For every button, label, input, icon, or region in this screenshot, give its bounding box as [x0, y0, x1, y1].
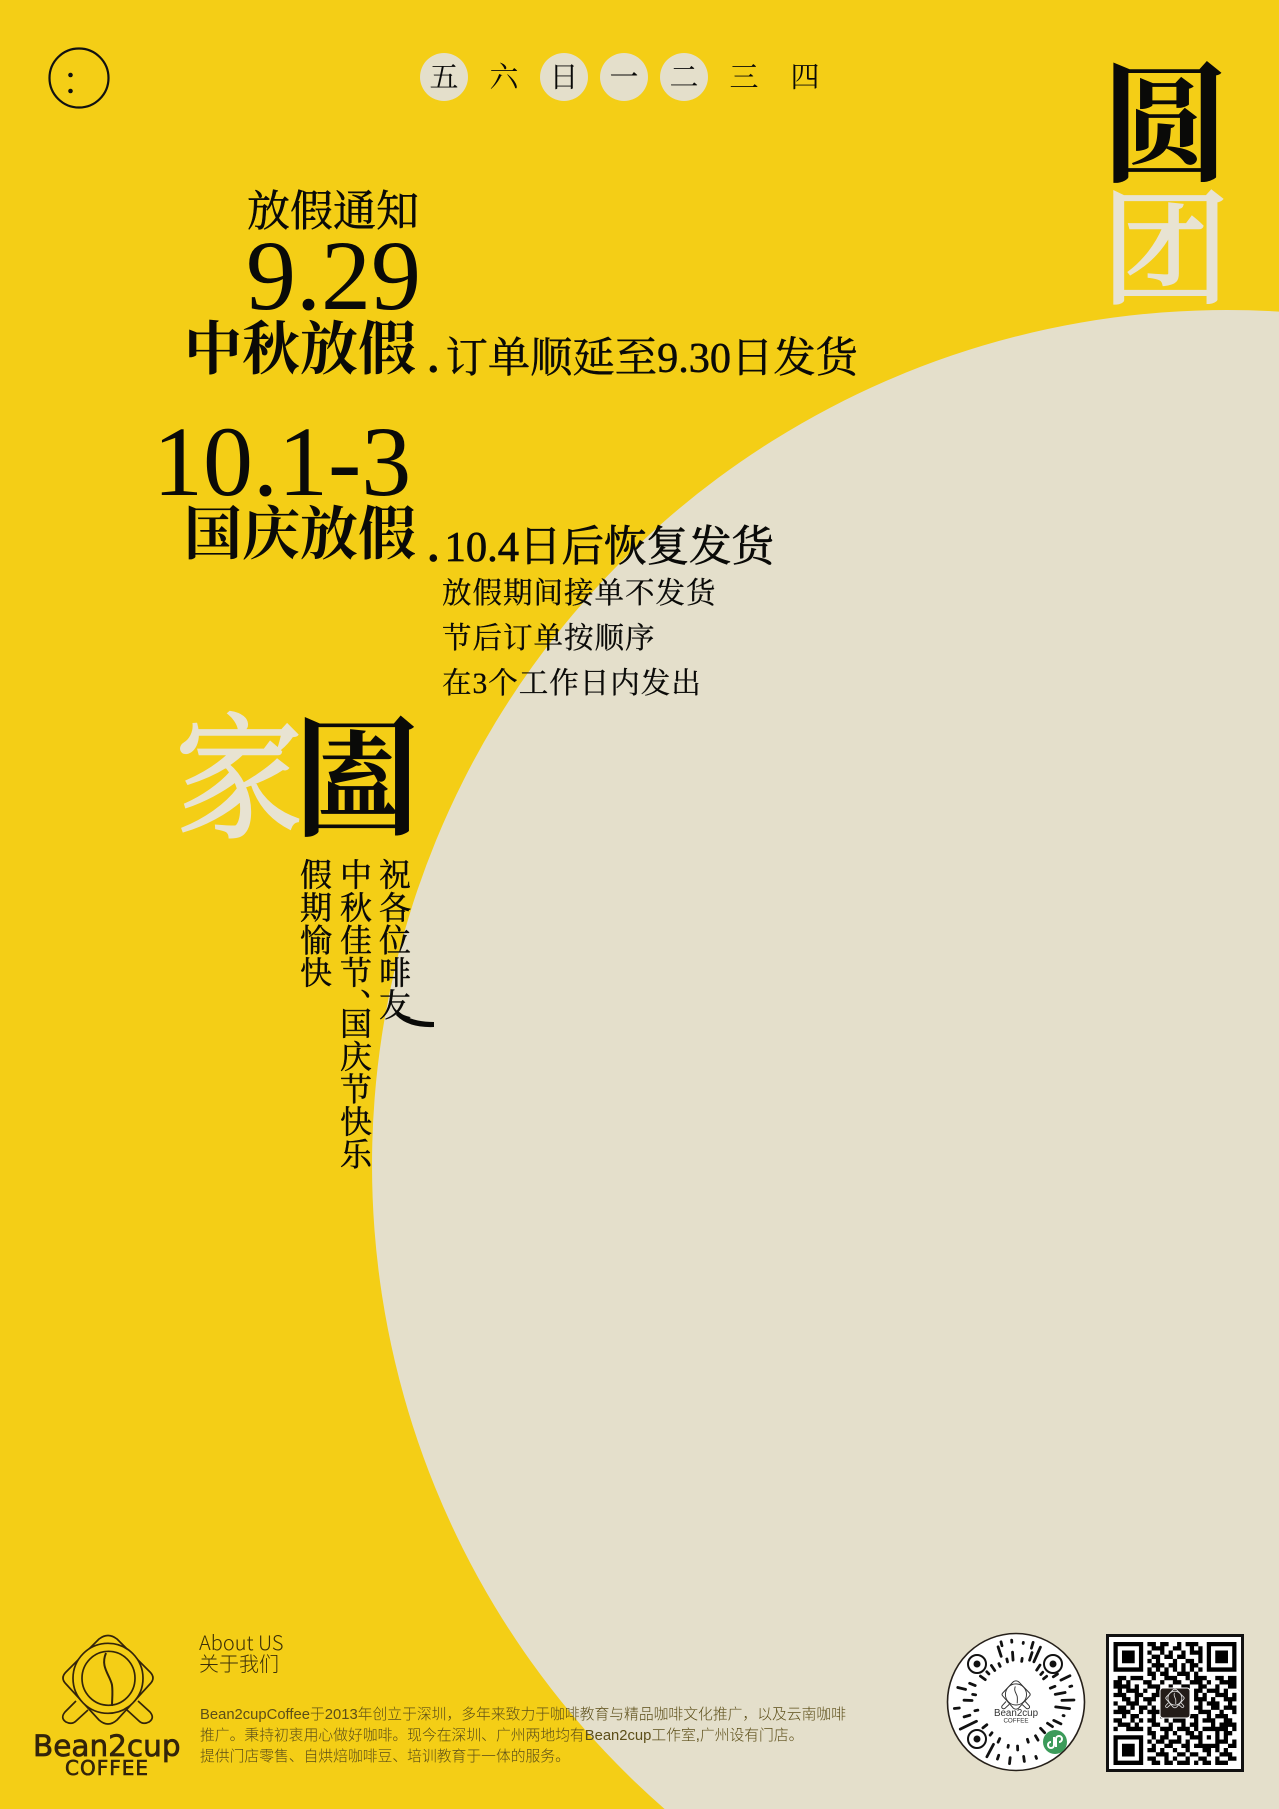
about body text	[200, 1706, 846, 1765]
icon: circle with two dots	[48, 47, 110, 109]
text block: shipping details: 节后订单按顺序	[442, 623, 656, 655]
weekday row: 二	[669, 62, 698, 94]
about body text: 提供门店零售、自烘焙咖啡豆、培训教育于一体的服务。	[200, 1749, 570, 1765]
about body text: 推广。秉持初衷用心做好咖啡。现今在深圳、广州两地均有Bean2cup工作室,广州设有门店。	[200, 1728, 803, 1744]
mini program code: COFFEE	[1003, 1718, 1029, 1724]
center brand text: Bean2cup	[994, 1708, 1039, 1719]
text block: shipping details: 放假期间接单不发货	[442, 578, 717, 610]
center logo	[1002, 1681, 1030, 1709]
about heading	[199, 1627, 283, 1677]
vertical greeting	[296, 858, 434, 1170]
weekday row: 三	[729, 62, 758, 94]
date: 10.1-3: 10.1-3	[153, 406, 411, 517]
logo: Bean2cup	[33, 1634, 181, 1780]
heading: mid-autumn holiday: 中秋放假	[184, 317, 416, 382]
weekday row: 四	[790, 62, 820, 94]
date: 9.29: 9.29	[246, 220, 421, 331]
finder rings	[968, 1655, 1062, 1748]
text block: shipping details	[442, 578, 717, 700]
about heading: About US	[199, 1627, 283, 1656]
heading: notice: 放假通知	[247, 188, 419, 236]
weekday row: 一	[609, 62, 638, 94]
mini program badge	[1043, 1730, 1067, 1754]
QR code	[1106, 1634, 1244, 1772]
code rays	[954, 1640, 1074, 1764]
QR modules	[1114, 1644, 1236, 1763]
title: 圆: 圆	[1100, 56, 1230, 200]
title: 圔: 圔	[295, 710, 419, 854]
shipping note: mid-autumn: .订单顺延至9.30日发货	[428, 335, 858, 382]
greeting line 2: 、	[336, 988, 372, 1021]
title: 家: 家	[175, 706, 303, 856]
brush tail of 友	[396, 1012, 434, 1028]
brand name: Bean2cup	[33, 1729, 181, 1763]
title: 团: 团	[1101, 182, 1230, 321]
shipping note: national day: .10.4日后恢复发货	[428, 524, 774, 571]
weekday row: 日	[549, 62, 578, 94]
logo mark	[62, 1634, 154, 1725]
mini program code	[946, 1632, 1086, 1772]
about heading: 关于我们	[199, 1648, 279, 1677]
heading: national day holiday: 国庆放假	[184, 502, 416, 567]
about body text: Bean2cupCoffee于2013年创立于深圳，多年来致力于咖啡教育与精品咖啡文化推广，以及云南咖啡	[200, 1706, 846, 1722]
QR center logo	[1160, 1688, 1190, 1718]
weekday row: 六	[489, 62, 518, 94]
weekday row	[420, 53, 820, 101]
weekday row: 五	[429, 62, 458, 94]
text block: shipping details: 在3个工作日内发出	[442, 668, 702, 700]
brand subline: COFFEE	[65, 1756, 149, 1780]
greeting line 1: 祝各位啡友	[375, 858, 411, 1021]
greeting line 3: 假期愉快	[296, 858, 332, 988]
greeting line 2: 中秋佳节 国庆节快乐	[336, 858, 372, 1170]
